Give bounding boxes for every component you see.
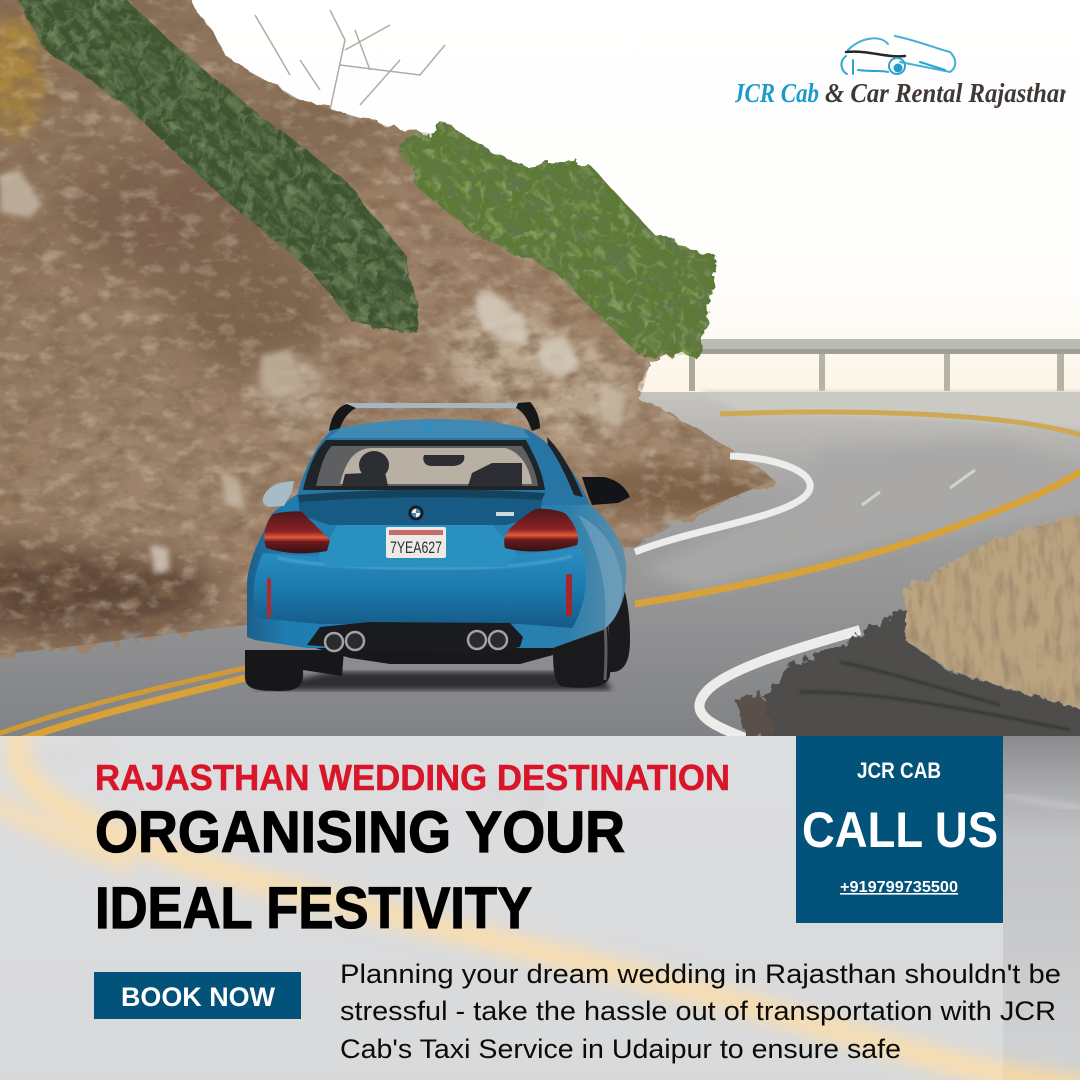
exhausts [325,631,507,651]
side markers [267,578,271,618]
license plate recess [318,525,517,567]
heading: red eyebrow: RAJASTHAN WEDDING DESTINATION [95,757,730,798]
right tail light [504,509,578,551]
paragraph text: Cab's Taxi Service in Udaipur to ensure safe [340,1034,901,1064]
roof [328,419,530,438]
antenna [422,420,437,431]
JCR CAB label: JCR CAB [857,758,941,783]
far right wheel [606,560,630,672]
dark green shrubs [0,0,430,340]
occupants and mirror [342,451,522,486]
side panel highlight [578,515,622,628]
right wheel [553,570,610,688]
bare tree branches [255,10,445,110]
dry grass [902,514,1080,710]
hillside [0,0,790,670]
translucent white panel [0,736,1003,1080]
rear window glass [316,446,538,486]
license plate [386,527,446,558]
ground shadow [250,672,612,690]
heading: line one: ORGANISING YOUR [95,800,625,865]
paragraph text [340,959,1061,1064]
white road edge lines [635,456,975,738]
button: book now: BOOK NOW [121,982,275,1012]
phone number: +919799735500 [840,879,958,896]
bottom panel background: blurred road [0,730,1080,1080]
cabin [298,420,590,505]
trunk [298,491,543,525]
side window [547,437,583,497]
blurred road marks [30,750,539,815]
left mirror [263,481,294,507]
lower body [247,492,626,648]
sky [0,0,1080,395]
bumper crease highlight [278,556,572,569]
bridge [686,339,1080,391]
logo [732,36,1073,108]
BMW badge [408,506,424,520]
button: book now [94,972,301,1019]
yellow road lines [0,412,1080,740]
black rubber curb [735,608,1080,746]
car [245,402,630,691]
left wheel [245,625,344,691]
panel: call us [796,736,1003,923]
bumper [254,548,586,628]
logo text: JCR Cab [732,78,819,108]
M2 badge [496,512,514,516]
diffuser [307,622,523,655]
pale boulders [0,170,625,574]
photo: mountain road scene [0,0,1080,746]
CALL US heading: CALL US [802,802,998,858]
rear window frame [303,440,545,490]
logo car mark [841,36,955,74]
right mirror [582,477,630,505]
license plate: 7YEA627 [390,538,442,557]
light green shrubs [398,121,717,360]
underbody [305,645,553,664]
blurred yellow lines [0,730,1080,1080]
left tail light [264,511,330,553]
wing [329,402,540,431]
heading: line two: IDEAL FESTIVITY [95,876,532,941]
paragraph text: stressful - take the hassle out of transportation with JCR [340,996,1056,1026]
road surface [0,392,1080,746]
paragraph text: Planning your dream wedding in Rajasthan shouldn't be [340,959,1061,989]
